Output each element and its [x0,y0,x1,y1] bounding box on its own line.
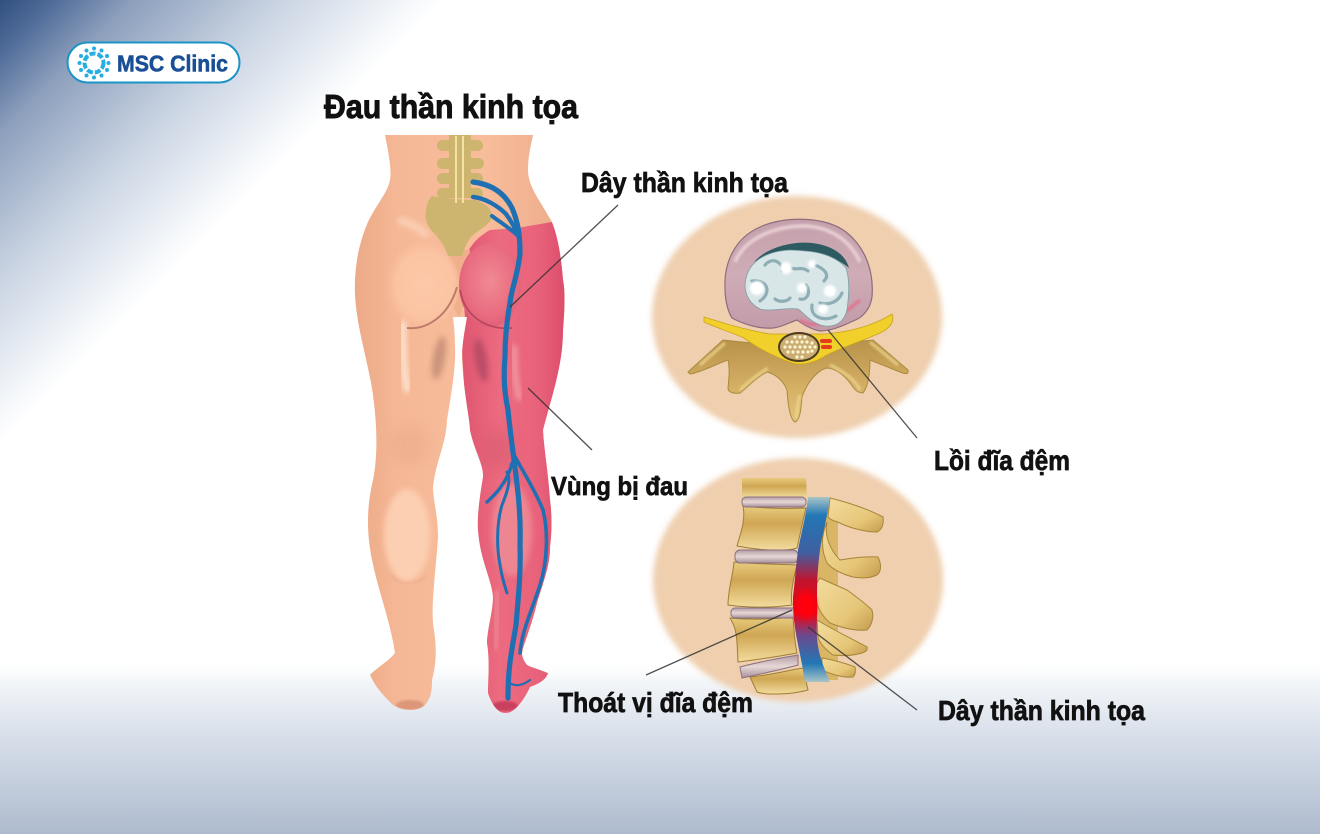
label: Lồi đĩa đệm: Lồi đĩa đệm [934,445,1070,476]
skin base [354,135,564,713]
leader lines [510,205,917,710]
glute left [392,250,459,321]
line: pain area [528,388,592,450]
spinal cord [778,332,820,362]
facet processes [814,498,883,677]
logo text: MSC Clinic [117,50,228,76]
red inflamed nerve [820,339,832,343]
label: Thoát vị đĩa đệm: Thoát vị đĩa đệm [558,687,753,718]
sacrum bottom [450,250,470,316]
vertebra bodies [728,478,808,694]
right thigh highlight [514,345,520,400]
title: Đau thần kinh tọa [324,88,579,125]
right thigh shadow [471,337,491,383]
illustration: body with legs [354,135,564,713]
bone highlights [700,342,898,418]
vertebra lines [456,136,463,203]
knees and calves right [489,435,510,465]
label: Dây thần kinh tọa bottom: Dây thần kinh tọa [938,695,1145,726]
line: sciatic nerve [510,205,618,307]
disc dark crescent [754,243,849,268]
line: herniated disc [646,610,792,675]
left thigh highlight [403,320,408,392]
spine and sacrum [425,135,492,256]
red pain area on leg [462,222,570,715]
sciatic nerve [473,182,546,698]
background gradient bottom [0,660,1320,834]
line: bulging disc [828,330,917,438]
icon: logo ring [78,46,110,80]
nerve yellow band [704,314,893,364]
inset background [652,196,942,438]
left thigh shadow [429,335,449,381]
knees and calves left [406,438,419,452]
background gradient top-left [0,0,444,444]
inset background [653,458,943,702]
line: nerve bottom [808,627,917,710]
nerve column [793,497,830,682]
vertebra bone [688,340,908,422]
logo: MSC Clinic [68,42,240,82]
lower inset: spine side view [653,458,943,702]
spinal discs [731,497,806,678]
upper inset: herniated disc cross-section [652,196,942,438]
glute right [459,243,521,327]
disc outer ring [725,219,872,331]
facet connectors [815,500,838,680]
label: Vùng bị đau: Vùng bị đau [551,471,688,501]
left hip highlight [398,220,428,236]
label: Dây thần kinh tọa top: Dây thần kinh tọa [581,167,788,198]
nucleus [745,250,849,326]
